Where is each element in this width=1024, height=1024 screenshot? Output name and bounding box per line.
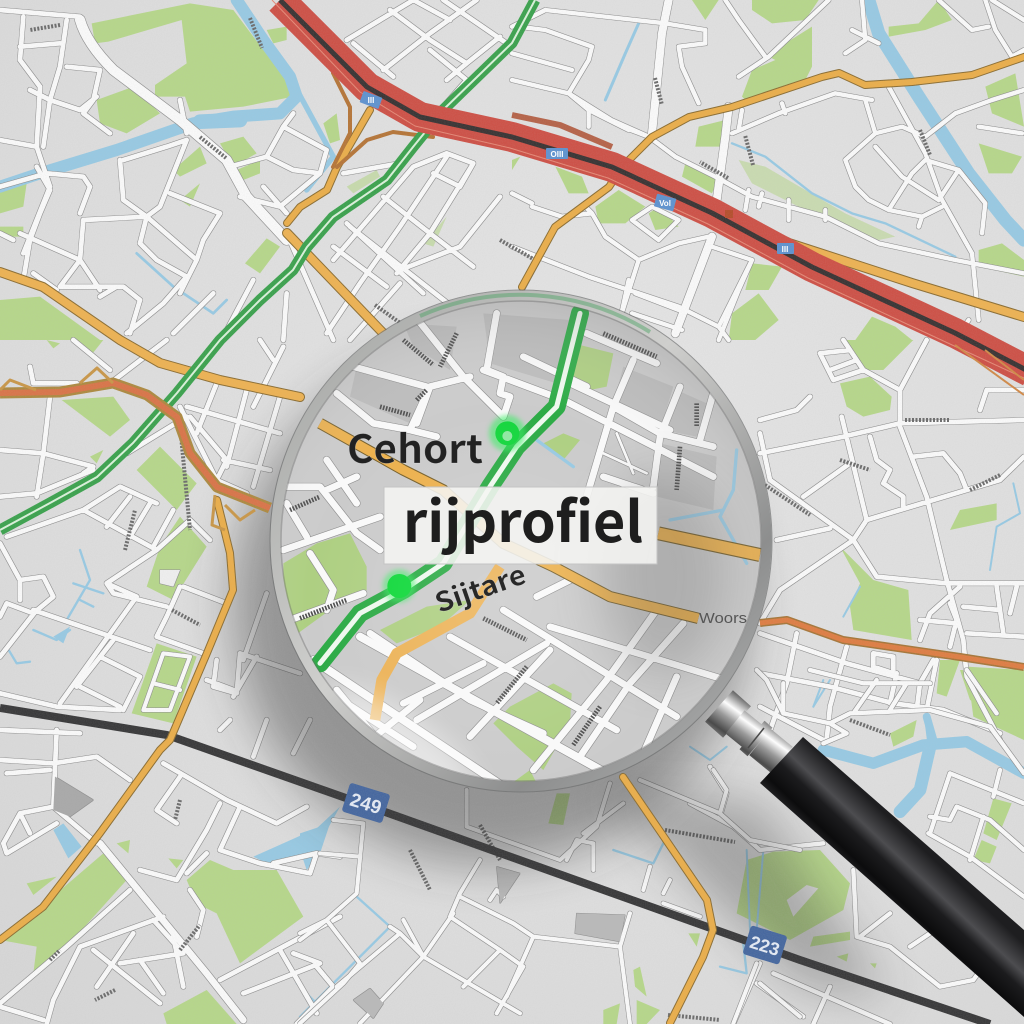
motorway shield badges: OIII	[551, 150, 563, 159]
lens label: Woors: Woors	[699, 610, 747, 627]
parks south-east	[737, 670, 1024, 968]
magnified lens view	[280, 300, 762, 782]
lens streets	[270, 310, 737, 790]
title box: rijprofiel: rijprofiel	[403, 478, 643, 559]
lens vignette and glare	[290, 300, 761, 777]
water south-central	[300, 823, 747, 1017]
lens label: Sijtare: Sijtare	[429, 553, 530, 621]
water south-east	[690, 680, 1024, 930]
parks north-west	[0, 3, 447, 340]
motorway shield badges: Vol	[659, 199, 671, 208]
streets south-east	[690, 670, 1024, 1024]
black grip	[760, 737, 1024, 1017]
orange-red regional roads	[0, 368, 1024, 667]
water west	[7, 550, 103, 663]
magnifier handle	[719, 706, 1024, 1017]
parks south-central	[548, 793, 700, 1024]
green route	[0, 0, 535, 530]
lens dark blocks	[350, 314, 716, 510]
railway line	[0, 708, 990, 1024]
streets south-central	[300, 770, 800, 1024]
lens street lettering marks	[290, 333, 697, 745]
motorway shield badges: III	[368, 96, 374, 105]
water south-west	[53, 807, 340, 1003]
lens green markers	[383, 415, 526, 603]
road badge 223	[742, 925, 788, 965]
magnifier rim	[270, 290, 772, 792]
road badge 249: 249	[347, 790, 384, 819]
motorway shield badges	[360, 91, 794, 254]
water east	[813, 483, 1020, 740]
metal ferrule	[719, 706, 782, 760]
lens label: Cehort: Cehort	[347, 419, 483, 475]
water north-west	[0, 0, 333, 313]
streets east	[760, 340, 1024, 740]
water north-east	[605, 0, 1024, 257]
red motorway	[272, 0, 1024, 395]
motorway shield badges: III	[782, 245, 788, 254]
parks east	[840, 340, 1024, 740]
road badge 249	[342, 783, 390, 823]
road badge 223: 223	[747, 932, 782, 960]
streets west	[0, 340, 300, 710]
streets north-west	[0, 0, 507, 340]
shadow of lens and handle	[232, 345, 890, 1000]
parks west	[47, 340, 207, 723]
lens orange roads	[320, 423, 760, 720]
lens water	[537, 440, 747, 563]
parks north-east	[512, 0, 1024, 340]
parks south-west	[0, 840, 303, 1024]
lens parks	[283, 343, 613, 790]
lens green route	[320, 313, 580, 663]
streets south-west	[0, 720, 340, 1024]
streets north-east	[512, 0, 1024, 340]
